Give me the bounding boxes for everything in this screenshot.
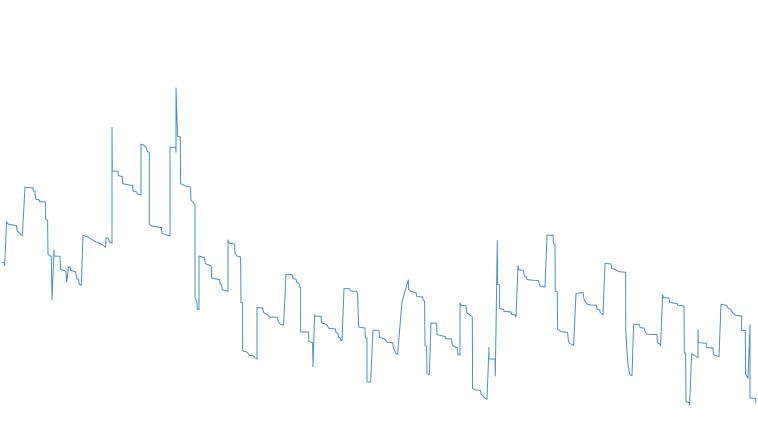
data line [2,88,756,405]
